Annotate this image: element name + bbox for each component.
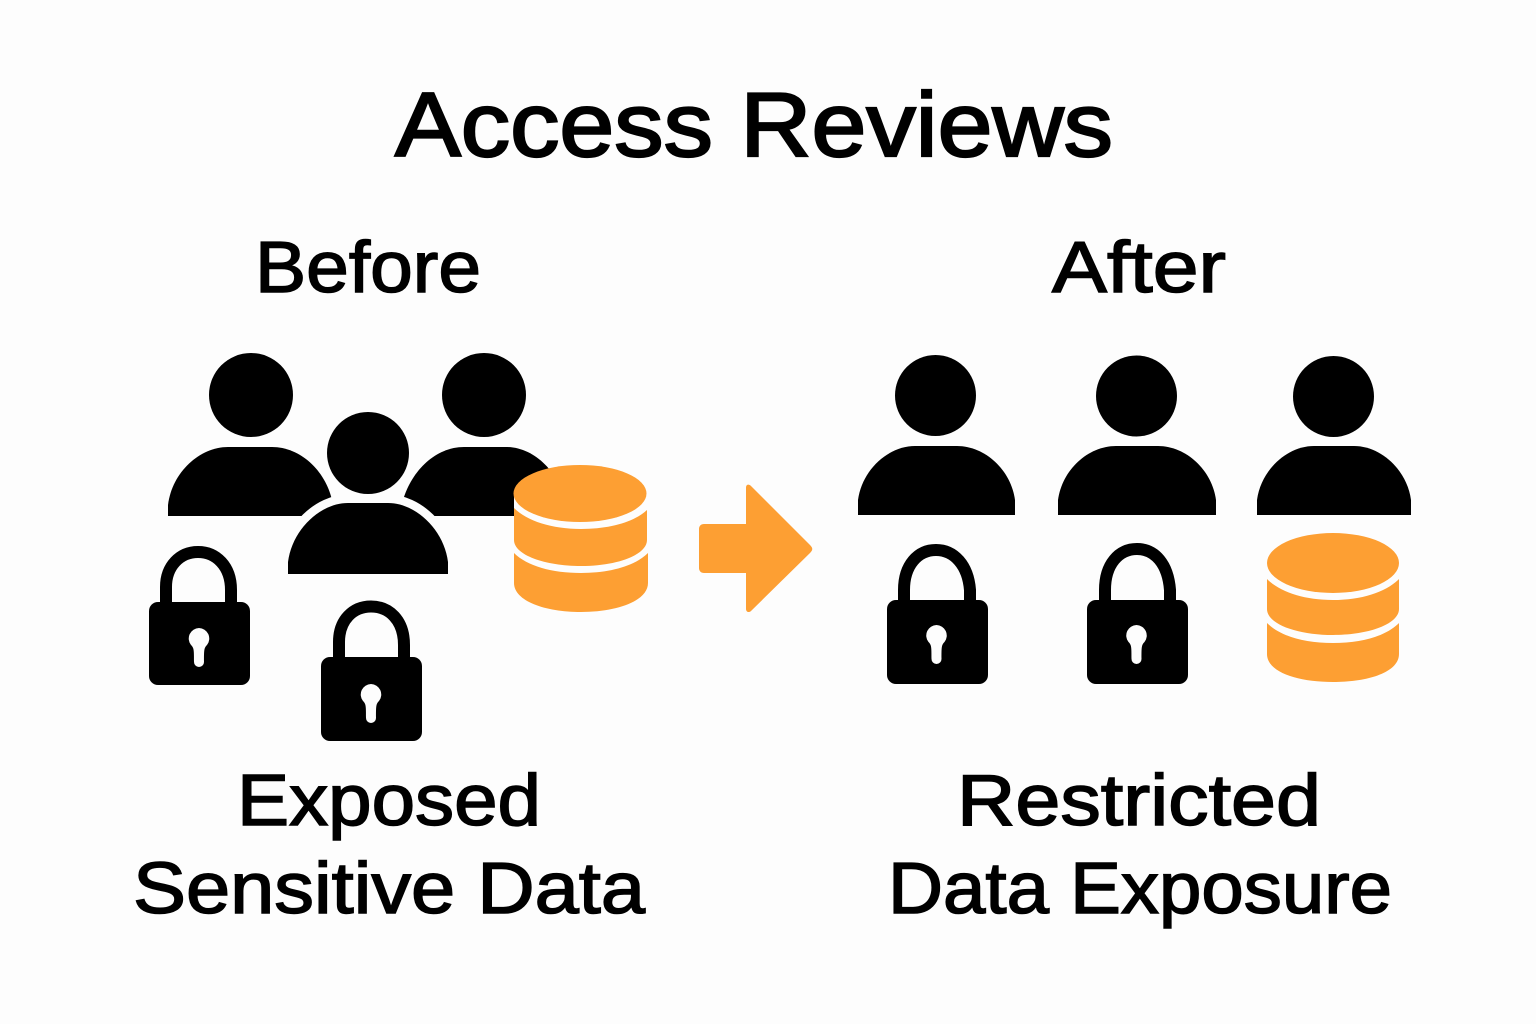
icon: lock left xyxy=(149,552,250,685)
arrow xyxy=(699,485,812,612)
icon: user center xyxy=(288,412,448,574)
caption: after xyxy=(888,761,1392,929)
icon: user 3 xyxy=(1257,356,1411,515)
icon: lock 2 xyxy=(1087,549,1188,684)
icon: user right xyxy=(403,353,565,516)
icon: user left xyxy=(168,353,332,516)
panel: after icons xyxy=(858,355,1411,684)
caption: before: Exposed xyxy=(237,761,541,841)
icon: lock center xyxy=(321,606,422,741)
caption: after: Data Exposure xyxy=(888,849,1392,929)
heading: after: After xyxy=(1052,228,1226,308)
panel: before icons xyxy=(149,353,648,741)
icon: user 2 xyxy=(1058,356,1216,515)
icon: user 1 xyxy=(858,355,1015,515)
caption: after: Restricted xyxy=(957,761,1321,841)
caption: before: Sensitive Data xyxy=(133,849,646,929)
icon: database before xyxy=(514,465,648,612)
heading: before: Before xyxy=(255,228,481,308)
title: Access Reviews xyxy=(395,75,1113,176)
caption: before xyxy=(133,761,646,929)
icon: lock 1 xyxy=(887,550,988,684)
icon: database after xyxy=(1267,533,1399,682)
